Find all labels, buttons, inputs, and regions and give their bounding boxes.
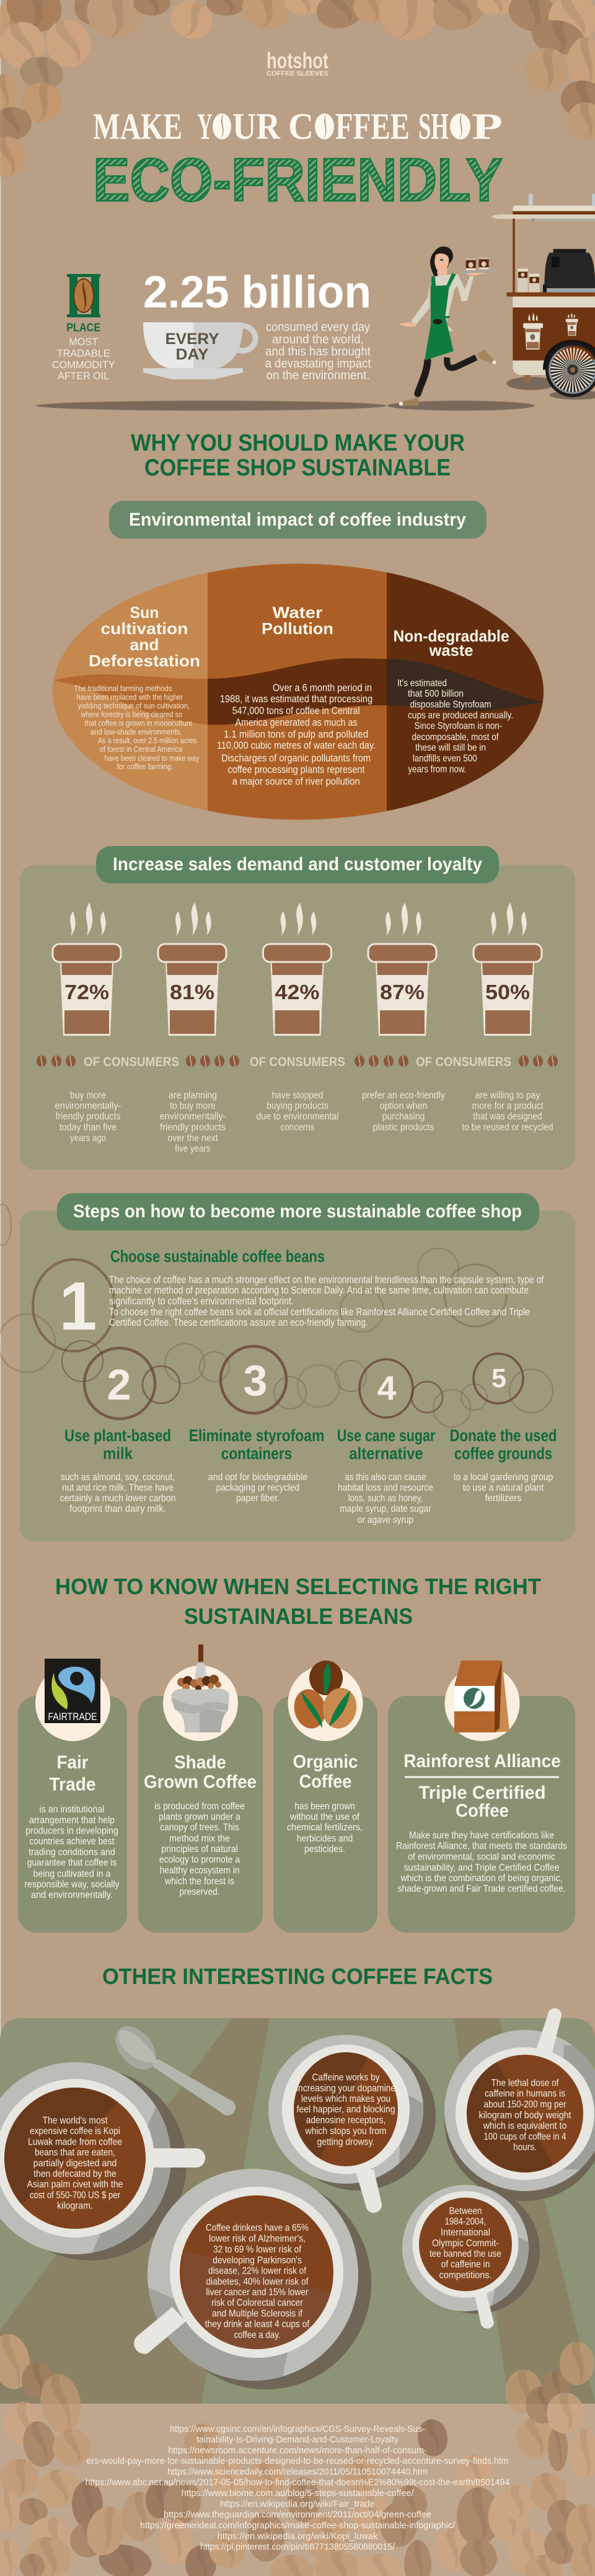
text: 72% description: years ago: [70, 1133, 106, 1144]
text: reference links: tainability-Is-Driving-Demand-and-Customer-Loyalty: [196, 2435, 399, 2445]
icon: sack of beans: [171, 1644, 229, 1732]
text: shade grown coffee: ecology to promote a: [159, 1855, 240, 1865]
cup fact: lethal dose: hours.: [513, 2142, 537, 2153]
text: water pollution: America generated as much as: [236, 717, 357, 728]
cup: 87%: [368, 902, 436, 1036]
text: 50% description: are willing to pay: [475, 1090, 540, 1101]
cup: 42%: 42%: [275, 981, 320, 1003]
text: 72% description: buy more: [70, 1090, 106, 1101]
text: non-degradable waste: decomposable, most of: [412, 732, 499, 743]
cup fact: health benefits: disease, 22% lower risk of: [208, 2266, 306, 2277]
step 2: 2: [107, 1361, 131, 1409]
text: 72% description: friendly products: [56, 1111, 121, 1122]
title: make your coffee shop: O: [450, 106, 470, 147]
text: non-degradable waste: Since Styrofoam is non-: [415, 721, 502, 731]
icon: every day cup: EVERY: [165, 330, 219, 348]
text: fair trade: trading conditions and: [29, 1847, 115, 1858]
step 4: alternative: [349, 1444, 423, 1463]
pill: steps heading: [57, 1193, 539, 1230]
step 3: Eliminate styrofoam: [189, 1426, 324, 1445]
text: consumed every day: [265, 320, 371, 382]
stat: most tradable commodity: MOST: [69, 336, 98, 348]
text: 81% description: to buy more: [170, 1101, 216, 1111]
text: organic coffee: pesticides.: [304, 1844, 345, 1855]
cup fact: lethal dose: about 150-200 mg per: [483, 2099, 566, 2110]
title: make your coffee shop: [93, 106, 503, 147]
icon: coffee bag: [454, 1661, 509, 1732]
text: water pollution: 1988, it was estimated that processing: [220, 694, 372, 705]
step 5: Donate the used: [450, 1426, 557, 1445]
coffee beans border bottom: [0, 2331, 595, 2576]
step 3: [189, 1356, 324, 1504]
title: make your coffee shop: P: [472, 106, 503, 147]
text: rainforest and triple certified: sustainability, and Triple Certified Coffee: [404, 1863, 559, 1873]
text: reference links: https://www.theguardian.com/environment/2011/oct/04/green-coffee: [164, 2510, 431, 2520]
text: organic coffee: Organic: [293, 1752, 358, 1772]
text: reference links: https://www.abc.net.au/news/2017-05-05/how-to-find-coffee-that-doesn%E2%80%99t-cost-the-earth/8501494: [86, 2478, 509, 2488]
text: 87% description: prefer an eco-friendly: [362, 1090, 445, 1101]
text: fair trade: countries achieve best: [30, 1837, 115, 1847]
cup fact: kopi luwak: partially digested and: [33, 2158, 117, 2169]
cup: 81%: [158, 902, 226, 1036]
text: fair trade: is an institutional: [40, 1804, 104, 1815]
heading: other coffee facts: OTHER INTERESTING COFFEE FACTS: [102, 1964, 493, 1989]
text: non-degradable waste: [397, 678, 513, 775]
text: 72% description: [55, 1090, 121, 1144]
text: fair trade: Fair: [57, 1752, 89, 1773]
cup fact: health benefits: [134, 2169, 371, 2389]
logo: hotshot coffee sleeves: COFFEE SLEEVES: [267, 70, 328, 77]
panel: increase sales: [20, 846, 575, 1170]
chart: environmental impact oval: [50, 558, 548, 824]
text: sun cultivation: yielding technique of sun cultivation,: [78, 701, 190, 710]
text: 50% description: that was designed: [473, 1111, 542, 1122]
text: water pollution: 110,000 cubic metres of water each day.: [217, 740, 376, 751]
text: rainforest and triple certified: Triple Certified: [419, 1783, 545, 1803]
text: 81% description: friendly products: [160, 1122, 226, 1132]
text: water pollution: 1.1 million tons of pulp and polluted: [224, 729, 368, 740]
text: shade grown coffee: Grown Coffee: [144, 1771, 257, 1793]
step 5: [450, 1364, 557, 1504]
text: shade grown coffee: Shade: [174, 1752, 226, 1773]
row: of consumers with beans: OF CONSUMERS: [250, 1055, 345, 1069]
cup fact: kopi luwak: kilogram.: [57, 2201, 93, 2212]
text: fair trade: guarantee that coffee is: [27, 1858, 117, 1868]
text: shade grown coffee: [144, 1752, 257, 1897]
cup fact: health benefits: diabetes, 40% lower risk of: [206, 2277, 309, 2287]
cup fact: lethal dose: 100 cups of coffee in 4: [483, 2132, 566, 2142]
step 2: certainly a much lower carbon: [60, 1493, 176, 1504]
cup fact: kopi luwak: The world's most: [42, 2115, 108, 2126]
title: make your coffee shop: MAKE: [93, 106, 182, 147]
heading: sun cultivation: Deforestation: [89, 651, 200, 670]
icon: every day cup: [143, 322, 255, 379]
step 2: [60, 1361, 176, 1514]
text: fair trade: arrangement that help: [29, 1815, 115, 1825]
pill: environmental impact: [109, 501, 487, 539]
text: reference links: https://greenerideal.com/infographics/make-coffee-shop-sustainable-infographic/: [140, 2521, 456, 2531]
cup fact: health benefits: and Multiple Sclerosis if: [212, 2308, 302, 2319]
text: rainforest and triple certified: Rainforest Alliance, that meets the standards: [396, 1841, 567, 1851]
cup: 72%: 72%: [64, 981, 109, 1003]
text: shade grown coffee: which the forest is: [164, 1876, 234, 1887]
text: consumed every day: around the world,: [272, 333, 364, 346]
text: rainforest and triple certified: [396, 1751, 567, 1894]
text: 50% description: more for a product: [472, 1101, 544, 1111]
text: shade grown coffee: is produced from coffee: [154, 1801, 245, 1812]
cup fact: lethal dose: The lethal dose of: [491, 2078, 559, 2089]
text: fair trade: responsible way, socially: [25, 1879, 120, 1890]
cup fact: caffeine works: adenosine receptors,: [306, 2115, 386, 2126]
step 2: such as almond, soy, coconut,: [61, 1472, 175, 1483]
panel: table background with rays: [0, 2018, 595, 2404]
cup fact: health benefits: coffee a day.: [234, 2330, 280, 2340]
step 2: footprint than dairy milk.: [69, 1504, 166, 1514]
text: non-degradable waste: It's estimated: [397, 678, 447, 689]
step 4: maple syrup, date sugar: [340, 1504, 431, 1514]
heading: why you should: COFFEE SHOP SUSTAINABLE: [144, 455, 451, 481]
cup fact: caffeine works: getting drowsy.: [317, 2137, 374, 2147]
text: water pollution: a major source of river pollution: [232, 776, 360, 787]
heading: water pollution: [262, 603, 333, 638]
cup: 72%: [53, 902, 121, 1036]
text: reference links: https://en.wikipedia.org/wiki/Fair_trade: [220, 2499, 375, 2509]
step 4: as this also can cause: [345, 1472, 426, 1483]
text: rainforest and triple certified: Coffee: [456, 1801, 509, 1821]
cup fact: lethal dose: [444, 2008, 595, 2201]
heading: sun cultivation: and: [130, 635, 159, 654]
heading: water pollution: Water: [273, 603, 322, 622]
stat: 2.25 billion: 2.25 billion: [143, 267, 371, 317]
ground shadow under woman: [387, 400, 535, 410]
step 4: or agave syrup: [358, 1515, 413, 1525]
text: sun cultivation: The traditional farming methods: [74, 684, 172, 693]
card: rainforest alliance: [388, 1661, 575, 1933]
heading: non-degradable waste: [393, 627, 509, 659]
panel: steps: [0, 1193, 575, 1542]
heading: sun cultivation: Sun: [130, 603, 159, 622]
step 1: significantly to coffee's environmental footprint.: [109, 1295, 294, 1307]
icon: every day cup: DAY: [176, 346, 209, 363]
text: sun cultivation: for coffee farming.: [117, 762, 174, 771]
stat: most tradable commodity: AFTER OIL: [58, 370, 109, 382]
text: water pollution: Discharges of organic pollutants from: [221, 752, 371, 764]
text: shade grown coffee: healthy ecosystem in: [160, 1866, 239, 1876]
illustration: waitress with tray: [399, 247, 500, 406]
title: make your coffee shop: O: [315, 106, 334, 147]
ground shadow: [36, 400, 387, 410]
cup fact: kopi luwak: cost of 550-700 US $ per: [30, 2190, 121, 2200]
cup fact: caffeine works: which stops you from: [305, 2126, 387, 2137]
step 2: milk: [103, 1444, 133, 1463]
cup fact: olympic ban: Olympic Commit-: [432, 2238, 499, 2249]
step 3: packaging or recycled: [216, 1483, 299, 1493]
cup fact: caffeine works: levels which makes you: [301, 2094, 390, 2104]
cup fact: health benefits: they drink at least 4 cups of: [205, 2319, 310, 2330]
cup fact: health benefits: risk of Colorectal cancer: [211, 2298, 303, 2308]
cup fact: health benefits: liver cancer and 15% lower: [206, 2287, 309, 2298]
step 3: containers: [221, 1444, 292, 1463]
cup fact: caffeine works: [268, 2035, 436, 2213]
text: non-degradable waste: these will still be in: [415, 743, 486, 753]
text: organic coffee: chemical fertilizers,: [287, 1822, 363, 1833]
step 5: coffee grounds: [454, 1444, 552, 1463]
cup fact: olympic ban: competitions.: [439, 2270, 492, 2281]
text: fair trade: [25, 1752, 120, 1900]
text: rainforest and triple certified: which is the combination of being organic,: [400, 1873, 563, 1884]
cup: 50%: [474, 902, 542, 1036]
step 2: Use plant-based: [64, 1426, 171, 1445]
text: sun cultivation: As a result, over 2.5 million acres: [98, 736, 197, 745]
text: non-degradable waste: cups are produced annually.: [408, 710, 513, 721]
illustration: coffee cart: [491, 194, 595, 400]
row: of consumers with beans: OF CONSUMERS: [416, 1055, 511, 1069]
text: organic coffee: Coffee: [299, 1771, 352, 1792]
step 3: paper fiber.: [236, 1493, 280, 1504]
step 4: Use cane sugar: [337, 1426, 436, 1445]
text: non-degradable waste: disposable Styrofoam: [410, 699, 491, 710]
text: shade grown coffee: preserved.: [180, 1887, 219, 1897]
heading: non-degradable waste: Non-degradable: [393, 627, 509, 645]
text: non-degradable waste: that 500 billion: [408, 689, 464, 699]
text: sun cultivation: where forestry is being cleared so: [81, 710, 182, 719]
step 4: [337, 1369, 436, 1525]
step 1: Certified Coffee. These certifications assure an eco-friendly farming.: [109, 1317, 368, 1328]
text: 81% description: [160, 1090, 226, 1154]
cup fact: kopi luwak: then defecated by the: [33, 2169, 117, 2179]
text: consumed every day: a devastating impact: [265, 357, 371, 371]
coffee rings decoration: [0, 1204, 553, 1427]
text: 72% description: environmentally-: [55, 1101, 121, 1111]
text: 42% description: concerns: [281, 1122, 314, 1132]
title: make your coffee shop: Y: [197, 106, 213, 147]
text: rainforest and triple certified: shade-grown and Fair Trade certified coffee.: [398, 1884, 565, 1894]
step 1: Choose sustainable coffee beans: [110, 1247, 325, 1266]
text: fair trade: Trade: [50, 1774, 95, 1795]
cup fact: olympic ban: Between: [449, 2206, 482, 2217]
text: reference links: https://www.sciencedaily.com/releases/2011/05/110510074440.htm: [167, 2467, 428, 2477]
text: 81% description: over the next: [167, 1133, 218, 1144]
text: 87% description: plastic products: [373, 1122, 434, 1132]
cup fact: health benefits: Coffee drinkers have a 65%: [206, 2223, 309, 2233]
text: 42% description: due to environmental: [257, 1111, 338, 1122]
text: reference links: [86, 2425, 509, 2552]
step 4: 4: [377, 1369, 397, 1407]
text: rainforest and triple certified: Rainforest Alliance: [403, 1751, 561, 1771]
text: shade grown coffee: method mix the: [169, 1833, 230, 1844]
heading: how to know: SUSTAINABLE BEANS: [184, 1603, 413, 1629]
cup fact: caffeine works: increasing your dopamine: [296, 2083, 395, 2094]
text: sun cultivation: have been replaced with the higher: [77, 692, 183, 702]
cup fact: olympic ban: 1984-2004,: [445, 2217, 486, 2227]
row: of consumers with beans: OF CONSUMERS: [84, 1055, 179, 1069]
stat: most tradable commodity: TRADABLE: [57, 347, 110, 359]
text: water pollution: Over a 6 month period in: [273, 682, 372, 694]
logo: hotshot coffee sleeves: hotshot: [267, 48, 328, 73]
step 3: 3: [244, 1356, 267, 1405]
title: eco-friendly: ECO-FRIENDLY: [93, 146, 503, 214]
stat: most tradable commodity: [52, 322, 115, 382]
cup fact: kopi luwak: expensive coffee is Kopi: [30, 2126, 120, 2137]
cup fact: olympic ban: [402, 2185, 540, 2329]
text: organic coffee: without the use of: [289, 1812, 360, 1822]
text: consumed every day: and this has brought: [265, 345, 371, 358]
text: rainforest and triple certified: Make sure they have certifications like: [409, 1830, 554, 1841]
text: sun cultivation: and low-shade environments.: [90, 727, 182, 736]
cup fact: caffeine works: Caffeine works by: [312, 2073, 379, 2083]
footer background: [0, 2404, 595, 2576]
heading: sun cultivation: [89, 603, 200, 670]
stat: most tradable commodity: COMMODITY: [52, 359, 115, 371]
step 5: fertilizers: [485, 1493, 521, 1504]
card: fair trade: [18, 1659, 127, 1933]
step 5: 5: [491, 1364, 506, 1393]
step 1: [59, 1247, 544, 1344]
step 1: To choose the right coffee beans look at official certifications like Rainforest Alliance Certified Coffee and Triple: [109, 1307, 530, 1318]
text: 50% description: [462, 1090, 553, 1132]
title: make your coffee shop: UR: [232, 106, 281, 147]
heading: why you should: [131, 430, 465, 481]
cup fact: health benefits: developing Parkinson's: [213, 2255, 302, 2265]
text: sun cultivation: [74, 684, 200, 771]
heading: water pollution: Pollution: [262, 619, 333, 638]
text: reference links: https://www.biome.com.au/blog/5-steps-sustainable-coffee/: [182, 2489, 414, 2499]
text: shade grown coffee: canopy of trees. This: [160, 1822, 239, 1833]
cup fact: health benefits: lower risk of Alzheimer's,: [209, 2234, 306, 2244]
text: 42% description: [257, 1090, 338, 1132]
text: reference links: ers-would-pay-more-for-sustainable-products-designed-to-be-reused-or-recycled-accenture-survey-finds.htm: [87, 2456, 508, 2466]
cup fact: lethal dose: which is equivalent to: [483, 2121, 566, 2132]
cup fact: olympic ban: of caffeine in: [441, 2259, 490, 2270]
text: fair trade: producers in developing: [25, 1826, 118, 1836]
text: 72% description: today than five: [60, 1122, 117, 1132]
card: shade grown coffee: [138, 1644, 263, 1933]
text: 87% description: purchasing: [382, 1111, 425, 1122]
text: sun cultivation: that coffee is grown in monoculture: [84, 718, 192, 728]
cup: 81%: 81%: [170, 981, 214, 1003]
text: reference links: https://en.wikipedia.org/wiki/Kopi_luwak: [217, 2531, 378, 2541]
text: 81% description: environmentally-: [160, 1111, 226, 1122]
text: sun cultivation: of forest in Central America: [100, 744, 183, 754]
text: organic coffee: herbicides and: [297, 1833, 353, 1844]
step 5: to a local gardening group: [454, 1472, 553, 1483]
cup fact: lethal dose: kilogram of body weight: [478, 2110, 571, 2121]
cup: 50%: 50%: [485, 981, 530, 1003]
step 1: 1: [59, 1268, 97, 1344]
text: rainforest and triple certified: of environmental, social and economic: [408, 1852, 555, 1862]
heading: non-degradable waste: waste: [429, 641, 474, 659]
cup fact: olympic ban: tee banned the use: [430, 2249, 501, 2259]
text: 81% description: five years: [175, 1144, 211, 1154]
text: organic coffee: [287, 1752, 363, 1855]
text: 42% description: buying products: [267, 1101, 328, 1111]
icon: fairtrade mark: FAIRTRADE: [48, 1711, 97, 1722]
pill: environmental impact: Environmental impact of coffee industry: [129, 509, 466, 530]
text: 87% description: [362, 1090, 445, 1132]
text: shade grown coffee: principles of natural: [161, 1844, 238, 1855]
title: make your coffee shop: SH: [418, 106, 449, 147]
icon: three coffee beans: [291, 1661, 360, 1732]
text: reference links: https://newsroom.accenture.com/news/more-than-half-of-consum-: [168, 2446, 427, 2456]
title: make your coffee shop: FFEE: [335, 106, 410, 147]
text: non-degradable waste: landfills even 500: [413, 754, 477, 764]
pill: steps heading: Steps on how to become more sustainable coffee shop: [73, 1201, 522, 1222]
row: of consumers with beans: [37, 1055, 558, 1069]
text: shade grown coffee: plants grown under a: [159, 1812, 240, 1822]
cup fact: caffeine works: feel happier, and blocking: [296, 2104, 395, 2115]
text: fair trade: and environmentally.: [31, 1890, 113, 1900]
cup fact: kopi luwak: beans that are eaten,: [35, 2148, 115, 2158]
text: organic coffee: has been grown: [294, 1801, 355, 1812]
text: sun cultivation: have been cleared to make way: [104, 754, 200, 762]
text: consumed every day: consumed every day: [266, 320, 370, 334]
title: make your coffee shop: O: [213, 106, 231, 147]
text: non-degradable waste: years from now.: [408, 764, 466, 775]
cup fact: olympic ban: International: [441, 2228, 490, 2238]
pill: increase sales demand: Increase sales demand and customer loyalty: [113, 854, 482, 875]
heading: sun cultivation: cultivation: [100, 619, 188, 638]
card: organic coffee: [273, 1661, 377, 1933]
logo: hotshot coffee sleeves: [267, 48, 328, 77]
step 1: machine or method of preparation according to Science Daily. And at the same time, cultivation can contribute: [109, 1285, 529, 1296]
text: 50% description: to be reused or recycled: [462, 1122, 553, 1132]
heading: why you should: WHY YOU SHOULD MAKE YOUR: [131, 430, 465, 456]
stat: most tradable commodity: PLACE: [66, 322, 100, 334]
text: reference links: https://pl.pinterest.com/pin/687713805580880015/: [200, 2543, 395, 2552]
step 5: to use a natural plant: [463, 1483, 544, 1493]
icon: fairtrade mark: [45, 1659, 100, 1723]
icon: first place bean H: [67, 274, 100, 317]
heading: how to know: HOW TO KNOW WHEN SELECTING THE RIGHT: [55, 1574, 541, 1599]
step 2: nut and rice milk. These have: [62, 1483, 174, 1493]
text: 42% description: have stopped: [272, 1090, 323, 1101]
icon: spoon: [107, 2019, 236, 2115]
cup fact: kopi luwak: Luwak made from coffee: [28, 2137, 122, 2147]
text: water pollution: coffee processing plants represent: [228, 764, 365, 775]
cup: 42%: [263, 902, 331, 1036]
cup: 87%: 87%: [380, 981, 425, 1003]
coffee beans border top: [0, 0, 595, 180]
title: make your coffee shop: C: [288, 106, 314, 147]
step 4: habitat loss and resource: [338, 1483, 433, 1493]
cup fact: health benefits: 32 to 69 % lower risk of: [213, 2244, 301, 2255]
text: water pollution: 547,000 tons of coffee in Central: [232, 705, 360, 717]
cup fact: kopi luwak: Asian palm civet with the: [27, 2179, 123, 2190]
pill: increase sales demand: [96, 846, 499, 883]
text: 81% description: are planning: [169, 1090, 217, 1101]
step 3: and opt for biodegradable: [208, 1472, 307, 1483]
step 4: loss, such as honey,: [348, 1493, 423, 1504]
text: water pollution: [217, 682, 376, 787]
text: 87% description: option when: [379, 1101, 428, 1111]
text: consumed every day: on the environment.: [267, 369, 369, 382]
text: reference links: https://www.cgsinc.com/en/infographics/CGS-Survey-Reveals-Sus-: [170, 2425, 425, 2435]
cup fact: lethal dose: caffeine in humans is: [485, 2089, 565, 2099]
cup fact: kopi luwak: [0, 2062, 205, 2269]
heading: how to know: [55, 1574, 541, 1629]
text: fair trade: being cultivated in a: [33, 1869, 111, 1879]
